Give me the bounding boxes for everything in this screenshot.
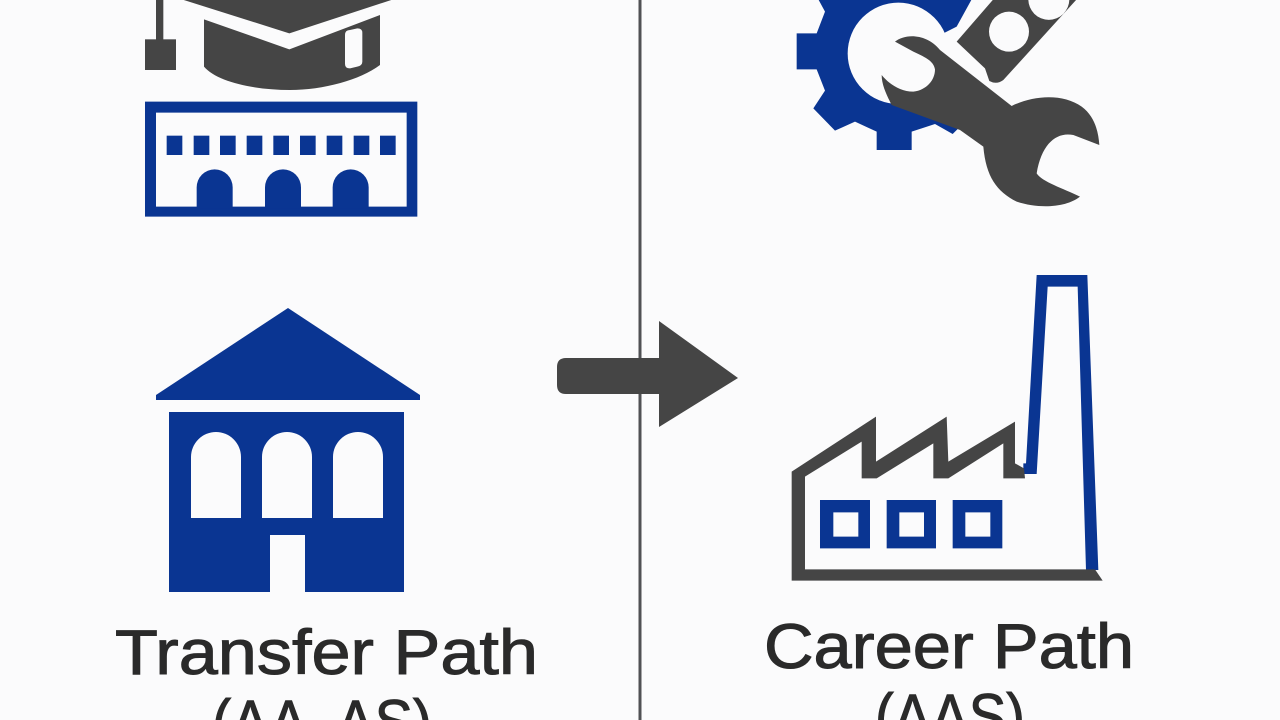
gear hole bbox=[848, 3, 949, 104]
icon: factory bbox=[792, 275, 1103, 581]
icon: university building bbox=[156, 308, 420, 592]
factory windows bbox=[820, 500, 1002, 548]
heading: transfer path: Transfer Path bbox=[115, 618, 538, 688]
heading: career path: Career Path bbox=[764, 612, 1134, 682]
icon: college building facade bbox=[145, 102, 417, 217]
wrench bbox=[882, 36, 1099, 206]
arrow: transfer to career bbox=[557, 321, 738, 427]
icon: gear and wrench bbox=[797, 0, 1099, 206]
icon: graduation cap bbox=[145, 0, 393, 90]
spanner handle end bbox=[957, 0, 1077, 83]
factory chimney bbox=[1023, 275, 1098, 570]
factory outline bbox=[792, 417, 1103, 581]
gear bbox=[797, 0, 972, 150]
